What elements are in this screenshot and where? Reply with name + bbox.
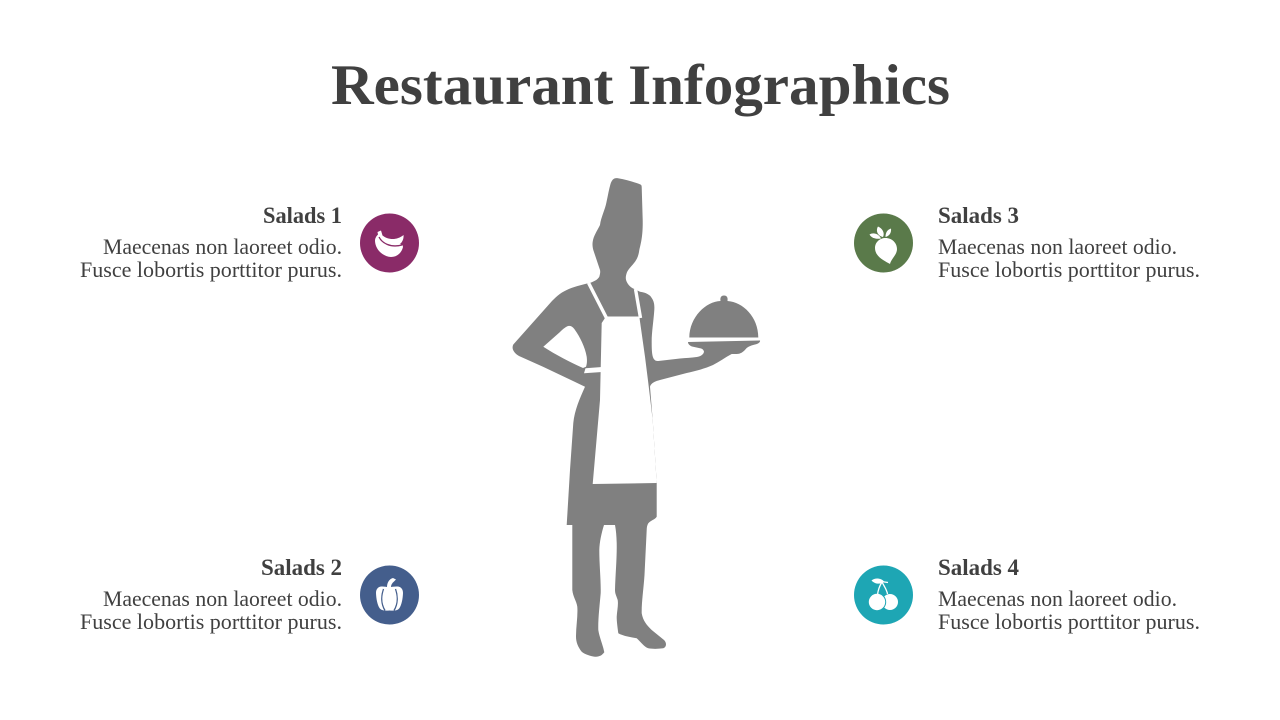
panel: Salads 3 bbox=[854, 203, 1200, 282]
panel: Salads 1 bbox=[80, 203, 419, 282]
panel: Salads 2 bbox=[80, 555, 419, 634]
icon: beet bbox=[854, 214, 913, 272]
chef body bbox=[513, 178, 760, 657]
title: Restaurant Infographics bbox=[331, 54, 950, 117]
icon: bell pepper bbox=[360, 566, 419, 624]
text block: Salads 4: Fusce lobortis porttitor purus. bbox=[938, 609, 1200, 634]
text block: Salads 4 bbox=[938, 586, 1200, 634]
apron bbox=[593, 316, 657, 484]
text block: Salads 3: Maecenas non laoreet odio. bbox=[938, 234, 1177, 259]
apron waist tie bbox=[584, 367, 602, 373]
heading: Salads 3: Salads 3 bbox=[938, 203, 1019, 228]
panel: Salads 4 bbox=[854, 555, 1200, 634]
apron straps bbox=[589, 283, 640, 318]
heading: Salads 2: Salads 2 bbox=[261, 555, 342, 580]
chef silhouette bbox=[513, 178, 760, 657]
text block: Salads 1: Fusce lobortis porttitor purus. bbox=[80, 257, 342, 282]
text block: Salads 2: Fusce lobortis porttitor purus. bbox=[80, 609, 342, 634]
icon: bananas bbox=[360, 214, 419, 272]
heading: Salads 1: Salads 1 bbox=[263, 203, 342, 228]
icon: cherries bbox=[854, 566, 913, 624]
text block: Salads 1 bbox=[80, 234, 342, 282]
serving cloche bbox=[689, 296, 758, 338]
text block: Salads 2 bbox=[80, 586, 342, 634]
arm gap bbox=[543, 326, 587, 368]
text block: Salads 2: Maecenas non laoreet odio. bbox=[103, 586, 342, 611]
text block: Salads 4: Maecenas non laoreet odio. bbox=[938, 586, 1177, 611]
heading: Salads 4: Salads 4 bbox=[938, 555, 1019, 580]
text block: Salads 3: Fusce lobortis porttitor purus. bbox=[938, 257, 1200, 282]
text block: Salads 3 bbox=[938, 234, 1200, 282]
text block: Salads 1: Maecenas non laoreet odio. bbox=[103, 234, 342, 259]
